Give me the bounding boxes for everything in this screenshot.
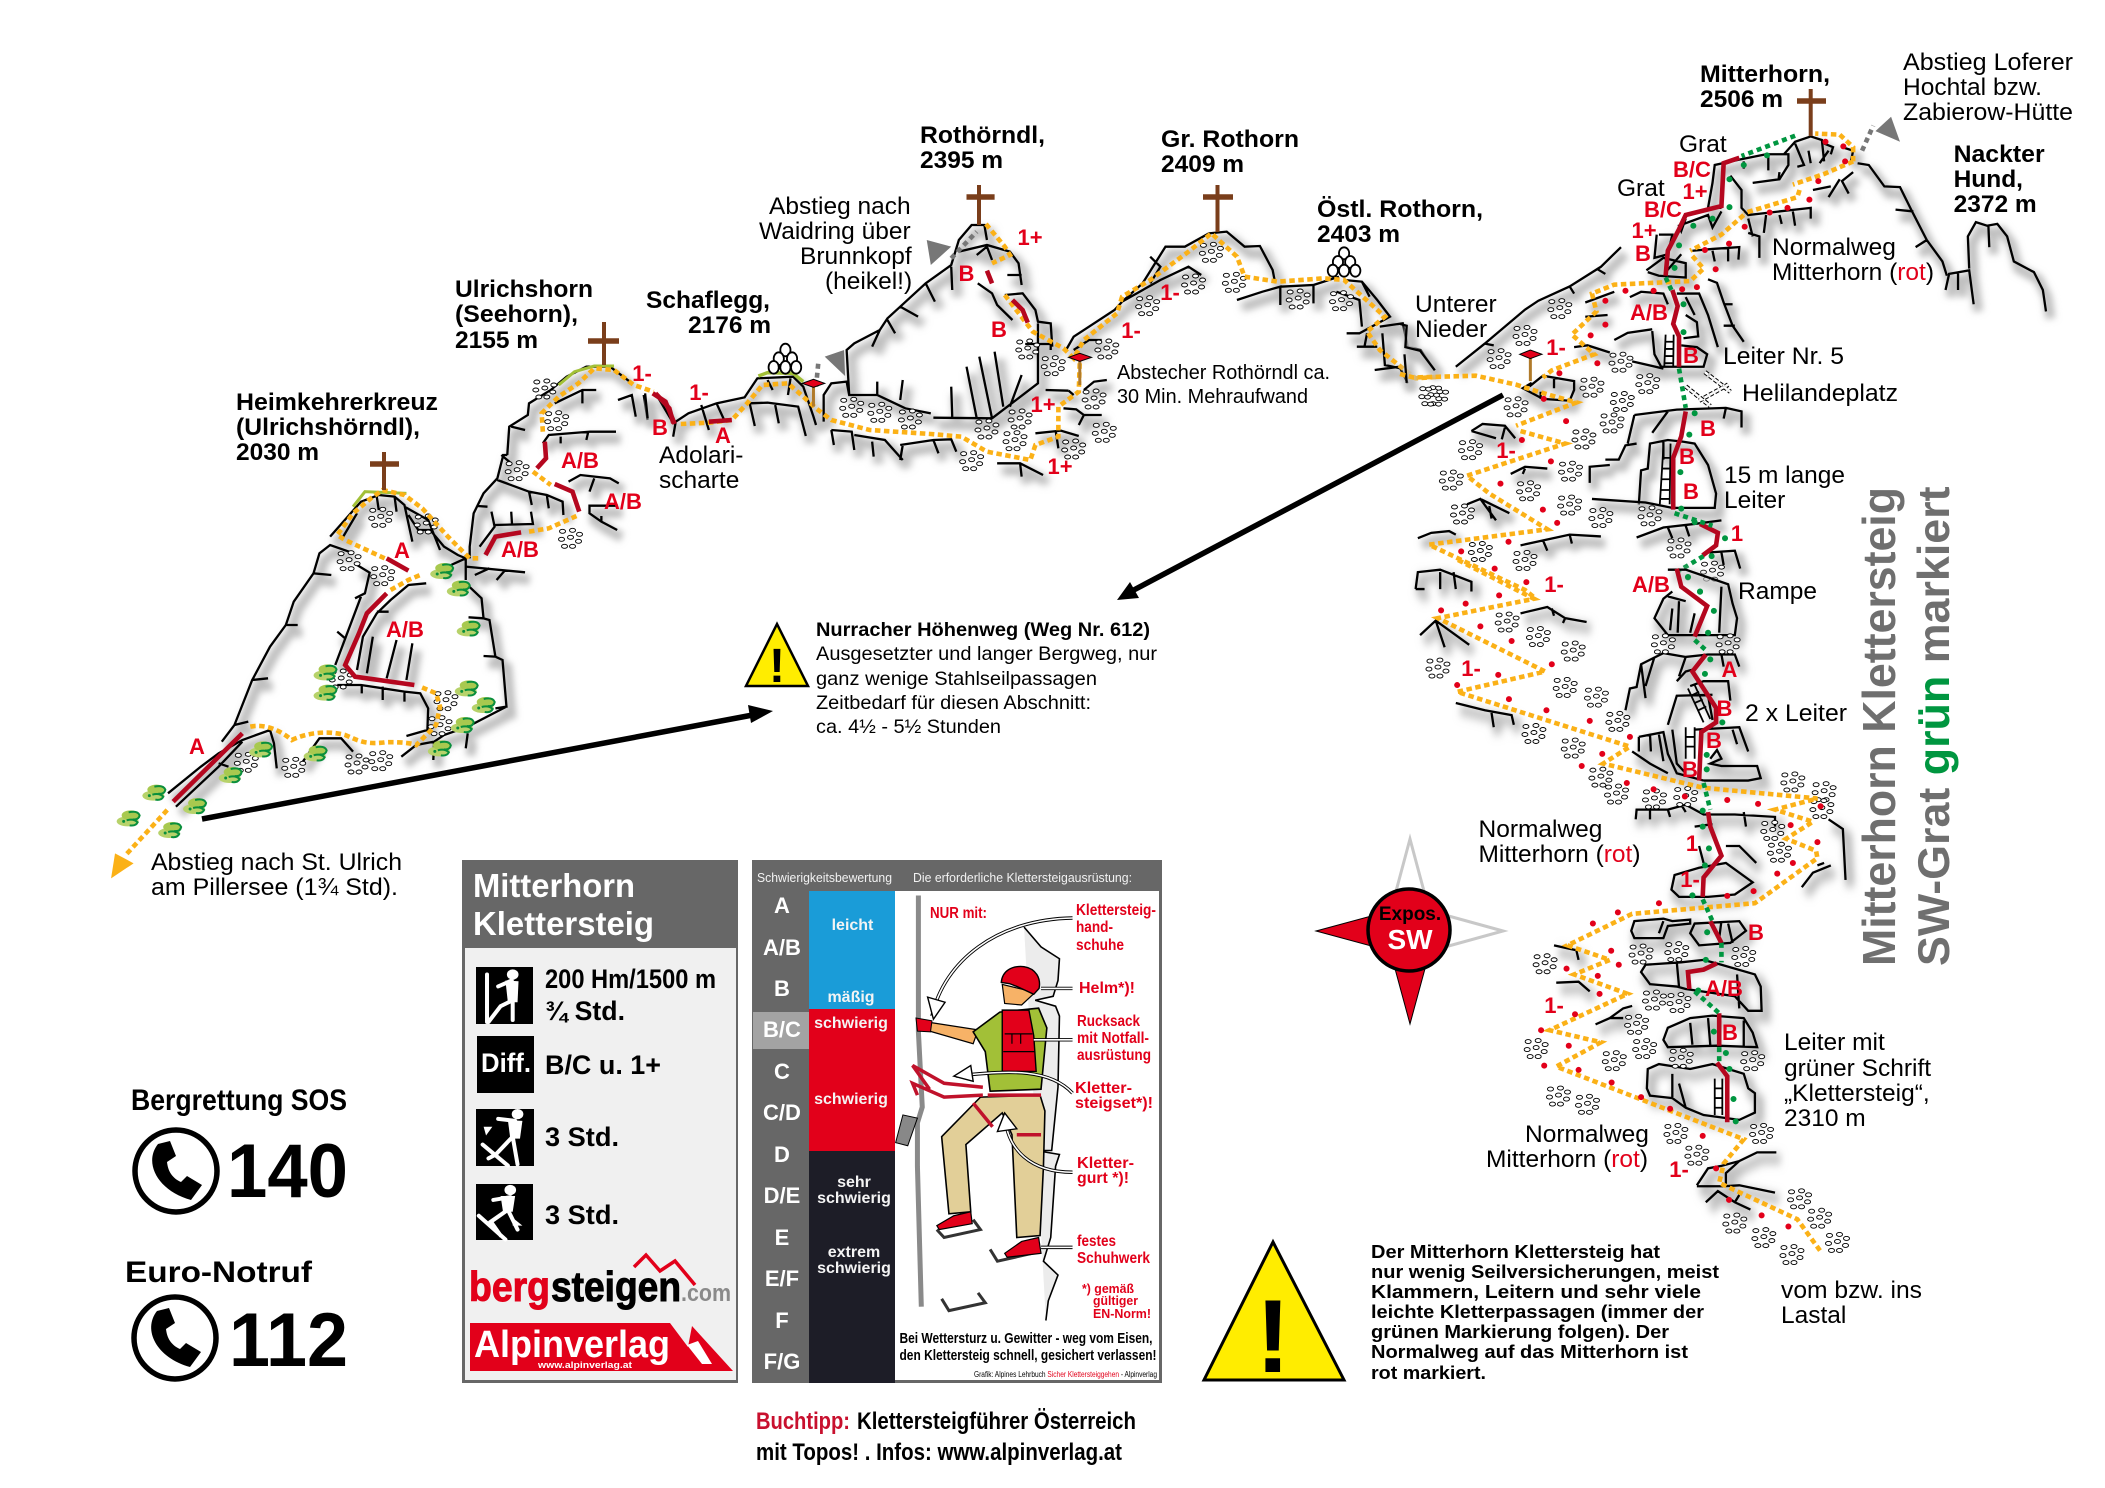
icon: phone 112 xyxy=(134,1297,216,1379)
difficulty grade labels on the map: A xyxy=(394,538,410,563)
logo: Alpinverlag: Alpinverlag xyxy=(474,1324,670,1366)
note: route description: Normalweg auf das Mitterhorn ist xyxy=(1371,1341,1688,1362)
panel: emergency numbers: Euro-Notruf xyxy=(125,1256,313,1289)
logo: bergsteigen.com: .com xyxy=(681,1280,731,1307)
difficulty grades column: F/G xyxy=(764,1349,800,1374)
place labels: 2 x Leiter xyxy=(1745,700,1847,727)
summit labels: 2155 m xyxy=(455,327,538,354)
equipment labels: EN-Norm! xyxy=(1093,1306,1151,1321)
summit labels: Nackter xyxy=(1954,141,2045,168)
green marked sections xyxy=(1666,136,1795,572)
difficulty colour scale: mäßig xyxy=(827,989,875,1006)
icon: descent time xyxy=(476,1184,533,1240)
scree fields xyxy=(840,242,1443,471)
weather warning: Bei Wettersturz u. Gewitter - weg vom Eisen, xyxy=(900,1330,1152,1347)
climber glove xyxy=(916,1018,932,1032)
equipment labels: steigset*)! xyxy=(1075,1095,1153,1112)
summit labels: 2403 m xyxy=(1317,221,1400,248)
place labels: „Klettersteig“, xyxy=(1784,1080,1930,1107)
panel: emergency numbers xyxy=(125,1084,348,1383)
difficulty grade labels on the map: B xyxy=(1706,728,1722,753)
difficulty grade labels on the map: 1- xyxy=(632,361,652,386)
place labels: Mitterhorn (rot) xyxy=(1478,841,1641,868)
place labels: Hochtal bzw. xyxy=(1903,74,2042,101)
place labels: am Pillersee (1¾ Std). xyxy=(151,874,398,901)
equipment labels: Helm*)! xyxy=(1079,980,1135,997)
difficulty colour scale: sehr xyxy=(837,1174,871,1191)
note: route description: grünen Markierung folgen). Der xyxy=(1371,1321,1669,1342)
difficulty grades column: B xyxy=(774,976,790,1001)
difficulty grade labels on the map: A/B xyxy=(604,489,642,514)
difficulty grade labels on the map: B/C xyxy=(1644,197,1682,222)
difficulty grade labels on the map: B xyxy=(1635,241,1651,266)
place labels: vom bzw. ins xyxy=(1781,1277,1922,1304)
note: route description: nur wenig Seilversicherungen, meist xyxy=(1371,1261,1719,1282)
summit labels: Gr. Rothorn xyxy=(1161,126,1299,153)
difficulty grades column: B/C xyxy=(763,1017,801,1042)
difficulty grades column: A/B xyxy=(763,935,801,960)
climber boots xyxy=(937,1212,1041,1257)
summit crosses xyxy=(384,89,1811,490)
equipment labels: ausrüstung xyxy=(1077,1047,1151,1064)
note: Nurracher Höhenweg xyxy=(816,619,1158,738)
climber legs xyxy=(942,1095,1045,1237)
difficulty grade labels on the map: 1+ xyxy=(1682,179,1708,204)
hiking route orange xyxy=(681,224,1440,460)
rock drawing: lower ridge xyxy=(1416,570,1850,1216)
difficulty grade labels on the map: A/B xyxy=(386,617,424,642)
difficulty grade labels on the map: A xyxy=(189,734,205,759)
place labels: Mitterhorn (rot) xyxy=(1772,259,1934,286)
place labels: Leiter Nr. 5 xyxy=(1723,343,1844,370)
equipment labels: gurt *)! xyxy=(1077,1170,1129,1187)
place labels: scharte xyxy=(659,467,739,494)
place labels: Leiter xyxy=(1724,487,1785,514)
carabiner xyxy=(896,1115,917,1146)
place labels: (heikel!) xyxy=(825,268,912,295)
summit labels: Hund, xyxy=(1954,166,2023,193)
equipment labels: Klettersteig- xyxy=(1076,902,1156,919)
difficulty grades column: D/E xyxy=(764,1183,800,1208)
place labels: 2310 m xyxy=(1784,1105,1866,1132)
red marker dots xyxy=(1441,604,1821,1227)
fixed cable xyxy=(917,895,922,1307)
difficulty grade labels on the map: 1- xyxy=(1544,993,1564,1018)
book tip xyxy=(756,1408,1136,1466)
place labels: Normalweg xyxy=(1478,816,1602,843)
difficulty grades column: A xyxy=(774,893,790,918)
signposts xyxy=(802,353,1092,407)
arrow: start of Nurracher Höhenweg to note xyxy=(202,705,773,819)
difficulty grade labels on the map: A xyxy=(1722,657,1738,682)
rock drawing: upper ridge and Nackter Hund xyxy=(1400,136,2050,576)
summit labels: (Seehorn), xyxy=(455,301,578,328)
summit labels: Heimkehrerkreuz xyxy=(236,389,438,416)
place labels: Zabierow-Hütte xyxy=(1903,99,2073,126)
trees xyxy=(117,563,495,838)
climber backpack xyxy=(1002,1010,1036,1071)
secured passages red xyxy=(173,393,673,802)
difficulty grade labels on the map: A/B xyxy=(1630,300,1668,325)
difficulty grade labels on the map: A/B xyxy=(1705,976,1743,1001)
difficulty grade labels on the map: B xyxy=(959,261,974,286)
icon: difficulty xyxy=(477,1036,534,1093)
map: upper Mitterhorn ridge xyxy=(1400,117,2050,597)
harness and via ferrata set xyxy=(913,1065,1041,1135)
difficulty grade labels on the map: B xyxy=(1700,416,1716,441)
summit labels: 2506 m xyxy=(1700,86,1783,113)
place labels: Grat xyxy=(1679,131,1727,158)
logo: Alpinverlag: www.alpinverlag.at xyxy=(537,1360,633,1371)
icon: large warning triangle xyxy=(1204,1242,1344,1395)
icon: ascent time xyxy=(476,1109,534,1166)
panel: emergency numbers: 140 xyxy=(227,1129,348,1214)
difficulty grade labels on the map: A xyxy=(715,423,731,448)
secured passages red xyxy=(653,271,1028,424)
difficulty grade labels on the map xyxy=(189,157,1764,1182)
climber arm xyxy=(927,1022,978,1044)
text: height and time: 200 Hm/1500 m xyxy=(545,964,716,994)
summit labels xyxy=(236,61,2045,466)
descent arrow to Loferer Hochtal xyxy=(1862,117,1900,151)
summit labels: 2372 m xyxy=(1954,191,2037,218)
weather warning xyxy=(900,1330,1156,1364)
note: route description xyxy=(1371,1241,1719,1383)
summit labels: Östl. Rothorn, xyxy=(1317,196,1483,223)
ladders xyxy=(1660,335,1674,504)
place labels: Abstieg Loferer xyxy=(1903,49,2073,76)
difficulty grades column: D xyxy=(774,1142,790,1167)
book tip: Klettersteigführer Österreich xyxy=(857,1408,1136,1435)
climber head and helmet xyxy=(1001,966,1040,1005)
summit labels: 2176 m xyxy=(688,312,771,339)
logo: bergsteigen.com: steigen xyxy=(551,1263,681,1310)
difficulty grade labels on the map: B xyxy=(652,415,668,440)
summit grass patch xyxy=(758,373,803,382)
difficulty grade labels on the map: 1+ xyxy=(1017,225,1043,250)
difficulty grades column: C xyxy=(774,1059,790,1084)
difficulty grades column xyxy=(763,893,801,1374)
difficulty grade labels on the map: 1- xyxy=(1121,318,1141,343)
difficulty grade labels on the map: 1- xyxy=(1160,280,1180,305)
equipment labels: NUR mit: xyxy=(930,905,987,922)
book tip: mit Topos! . Infos: www.alpinverlag.at xyxy=(756,1439,1122,1466)
difficulty grade labels on the map: 1- xyxy=(1496,438,1516,463)
hiking route orange xyxy=(250,368,654,745)
place labels: Brunnkopf xyxy=(800,243,912,270)
difficulty colour scale: schwierig xyxy=(814,1091,888,1108)
logo: bergsteigen.com: berg xyxy=(469,1263,550,1310)
compass exposure SW: Expos. xyxy=(1379,904,1441,925)
climber shirt xyxy=(973,1008,1047,1091)
place labels: Rampe xyxy=(1738,578,1817,605)
place labels: Leiter mit xyxy=(1784,1029,1885,1056)
signpost Unterer Nieder xyxy=(1520,350,1542,381)
summit labels: 2409 m xyxy=(1161,151,1244,178)
note: route description: rot markiert. xyxy=(1371,1362,1486,1383)
difficulty grade labels on the map: 1+ xyxy=(1047,454,1073,479)
difficulty grades column: E/F xyxy=(765,1266,799,1291)
note: Nurracher Höhenweg: Ausgesetzter und langer Bergweg, nur xyxy=(816,643,1158,665)
note: Nurracher Höhenweg: ca. 4½ - 5½ Stunden xyxy=(816,716,1001,738)
icon: difficulty: Diff. xyxy=(481,1048,531,1078)
green marker dots xyxy=(1688,577,1736,1121)
scree fields xyxy=(234,379,583,777)
arrow: end of Nurracher Höhenweg to note xyxy=(1117,395,1503,600)
icon: ascent height xyxy=(476,967,533,1024)
difficulty grade labels on the map: B/C xyxy=(1673,157,1711,182)
difficulty grades column: F xyxy=(775,1308,789,1333)
logo: Alpinverlag xyxy=(470,1323,733,1371)
normal route orange xyxy=(1438,560,1822,1253)
difficulty grade labels on the map: B xyxy=(1682,757,1698,782)
equipment labels: Schuhwerk xyxy=(1077,1250,1150,1267)
equipment labels: Kletter- xyxy=(1075,1080,1132,1097)
place labels xyxy=(151,49,2073,1329)
place labels: Abstieg nach xyxy=(769,193,911,220)
scree fields xyxy=(1425,299,1725,581)
panel: emergency numbers: Bergrettung SOS xyxy=(131,1084,347,1117)
rock drawing: central ridge xyxy=(645,225,1438,484)
place labels: Grat xyxy=(1617,175,1665,202)
descent arrow to Waidring xyxy=(816,232,977,387)
descent arrow to St. Ulrich xyxy=(111,810,167,878)
text: height and time xyxy=(545,964,716,1026)
normal route orange xyxy=(1400,134,1853,597)
book tip: Buchtipp: xyxy=(756,1408,850,1435)
red marker dots xyxy=(1461,142,1845,595)
icon: phone 140 xyxy=(135,1130,217,1212)
place labels: Normalweg xyxy=(1772,234,1896,261)
difficulty grade labels on the map: 1 xyxy=(1686,831,1698,856)
note: route description: Der Mitterhorn Klettersteig hat xyxy=(1371,1241,1660,1262)
scree fields xyxy=(1426,612,1850,1265)
place labels: Abstecher Rothörndl ca. xyxy=(1117,362,1330,384)
note: route description: leichte Kletterpassagen (immer der xyxy=(1371,1301,1704,1322)
difficulty grade labels on the map: 1 xyxy=(1731,521,1743,546)
summit labels: 2030 m xyxy=(236,439,319,466)
difficulty colour scale: schwierig xyxy=(814,1015,888,1032)
summit cross arms xyxy=(370,101,1826,464)
vertical title: Mitterhorn Klettersteig xyxy=(1853,487,1905,966)
panel: Mitterhorn Klettersteig key data xyxy=(462,860,738,1383)
equipment labels: Rucksack xyxy=(1077,1013,1140,1030)
place labels: Nieder xyxy=(1415,316,1487,343)
difficulty grade labels on the map: 1- xyxy=(1546,335,1566,360)
graphic credit: Grafik: Alpines Lehrbuch Sicher Klettersteiggehen - Alpinverlag xyxy=(974,1370,1157,1379)
difficulty grade labels on the map: 1+ xyxy=(1631,218,1657,243)
place labels: 30 Min. Mehraufwand xyxy=(1117,386,1308,408)
difficulty grade labels on the map: B xyxy=(1683,343,1699,368)
cairn Östl. Rothorn xyxy=(1328,247,1360,277)
helicopter landing site marker xyxy=(1686,372,1730,406)
summit labels: Schaflegg, xyxy=(646,287,770,314)
logo: bergsteigen.com xyxy=(469,1255,731,1310)
equipment labels: Kletter- xyxy=(1077,1155,1134,1172)
pointer arrows xyxy=(928,918,1073,1247)
ladders xyxy=(1686,685,1722,1115)
place labels: Waidring über xyxy=(759,218,911,245)
place labels: Lastal xyxy=(1781,1302,1846,1329)
text: difficulty: B/C u. 1+ xyxy=(545,1050,661,1080)
place labels: Abstieg nach St. Ulrich xyxy=(151,849,402,876)
difficulty grade labels on the map: A/B xyxy=(501,537,539,562)
summit labels: Mitterhorn, xyxy=(1700,61,1830,88)
green marker dots xyxy=(1675,155,1767,592)
difficulty colour scale: leicht xyxy=(832,917,874,934)
summit labels: Rothörndl, xyxy=(920,122,1045,149)
vertical title: SW-Grat grün markiert xyxy=(1909,486,1959,966)
difficulty grade labels on the map: B xyxy=(1717,696,1732,721)
green marked sections xyxy=(1695,640,1721,1062)
difficulty grade labels on the map: 1- xyxy=(1544,572,1564,597)
note: Nurracher Höhenweg: Zeitbedarf für diesen Abschnitt: xyxy=(816,692,1091,714)
place labels: grüner Schrift xyxy=(1784,1055,1931,1082)
note: Nurracher Höhenweg: ganz wenige Stahlseilpassagen xyxy=(816,668,1097,690)
summit grass patches xyxy=(353,366,614,507)
icon: large warning triangle: ! xyxy=(1256,1279,1290,1395)
difficulty colour scale: schwierig xyxy=(817,1260,891,1277)
panel header text: Schwierigkeitsbewertung xyxy=(757,870,892,885)
illustration: climber with equipment xyxy=(896,895,1073,1321)
difficulty grades column: C/D xyxy=(763,1100,801,1125)
climbing route red xyxy=(1666,158,1739,555)
weather warning: den Klettersteig schnell, gesichert verlassen! xyxy=(900,1347,1156,1364)
difficulty grade labels on the map: B xyxy=(1722,1020,1738,1045)
difficulty colour scale xyxy=(753,891,895,1383)
equipment labels: schuhe xyxy=(1076,937,1124,954)
difficulty grade labels on the map: 1- xyxy=(1680,867,1700,892)
text: descent time: 3 Std. xyxy=(545,1200,619,1230)
place labels: Adolari- xyxy=(659,442,743,469)
iron rungs xyxy=(937,1220,1041,1311)
panel heading: Mitterhorn xyxy=(473,867,635,904)
cairn Schaflegg xyxy=(769,344,801,374)
map: central ridge with Schaflegg, Rothörndl, Gr. Rothorn, Östl. Rothorn xyxy=(645,224,1443,484)
difficulty grade labels on the map: B xyxy=(1679,444,1695,469)
difficulty grade labels on the map: 1- xyxy=(1461,656,1481,681)
panel: emergency numbers: 112 xyxy=(229,1298,348,1383)
map: western ridge from Heimkehrerkreuz to Ulrichshorn xyxy=(111,366,678,878)
difficulty grade labels on the map: A/B xyxy=(561,448,599,473)
place labels: Helilandeplatz xyxy=(1742,380,1898,407)
compass exposure SW xyxy=(1316,839,1503,1024)
difficulty grade labels on the map: B xyxy=(1748,920,1764,945)
summit labels: Ulrichshorn xyxy=(455,276,593,303)
difficulty grade labels on the map: B xyxy=(1683,479,1699,504)
rock face xyxy=(1024,927,1059,1321)
equipment labels: gültiger xyxy=(1093,1293,1138,1308)
difficulty colour scale: schwierig xyxy=(817,1190,891,1207)
map: lower Mitterhorn ridge xyxy=(1416,560,1850,1265)
text: height and time: ¾ Std. xyxy=(545,996,625,1026)
rock drawing: Heimkehrerkreuz and Ulrichshorn xyxy=(168,367,678,814)
difficulty grades column: E xyxy=(775,1225,789,1250)
equipment labels: festes xyxy=(1077,1233,1116,1250)
note: route description: Klammern, Leitern und sehr viele xyxy=(1371,1281,1701,1302)
panel heading xyxy=(473,867,654,942)
difficulty grade labels on the map: 1- xyxy=(689,380,709,405)
summit labels: 2395 m xyxy=(920,147,1003,174)
equipment labels xyxy=(930,902,1156,1321)
difficulty grade labels on the map: A/B xyxy=(1632,572,1670,597)
compass exposure SW: SW xyxy=(1387,924,1433,955)
vertical title xyxy=(1853,486,1959,966)
icon: small warning triangle xyxy=(746,624,808,693)
panel heading: Klettersteig xyxy=(473,905,654,942)
place labels: Unterer xyxy=(1415,291,1497,318)
summit labels: (Ulrichshörndl), xyxy=(236,414,420,441)
icon: small warning triangle: ! xyxy=(769,640,785,693)
text: ascent time: 3 Std. xyxy=(545,1122,619,1152)
place labels: Mitterhorn (rot) xyxy=(1486,1146,1648,1173)
place labels: 15 m lange xyxy=(1724,462,1845,489)
place labels: Normalweg xyxy=(1525,1121,1649,1148)
panel header text: Die erforderliche Klettersteigausrüstung: xyxy=(913,870,1132,885)
panel: difficulty scale and equipment xyxy=(752,860,1162,1383)
difficulty grade labels on the map: 1- xyxy=(1669,1157,1689,1182)
difficulty grade labels on the map: B xyxy=(991,317,1007,342)
equipment labels: *) gemäß xyxy=(1082,1281,1134,1296)
difficulty grade labels on the map: 1+ xyxy=(1030,392,1056,417)
note: Nurracher Höhenweg: Nurracher Höhenweg (Weg Nr. 612) xyxy=(816,619,1150,641)
climbing route red xyxy=(1677,569,1727,1122)
panel header text xyxy=(757,870,1132,885)
equipment labels: mit Notfall- xyxy=(1077,1030,1149,1047)
difficulty colour scale: extrem xyxy=(828,1244,880,1261)
equipment labels: hand- xyxy=(1076,919,1113,936)
